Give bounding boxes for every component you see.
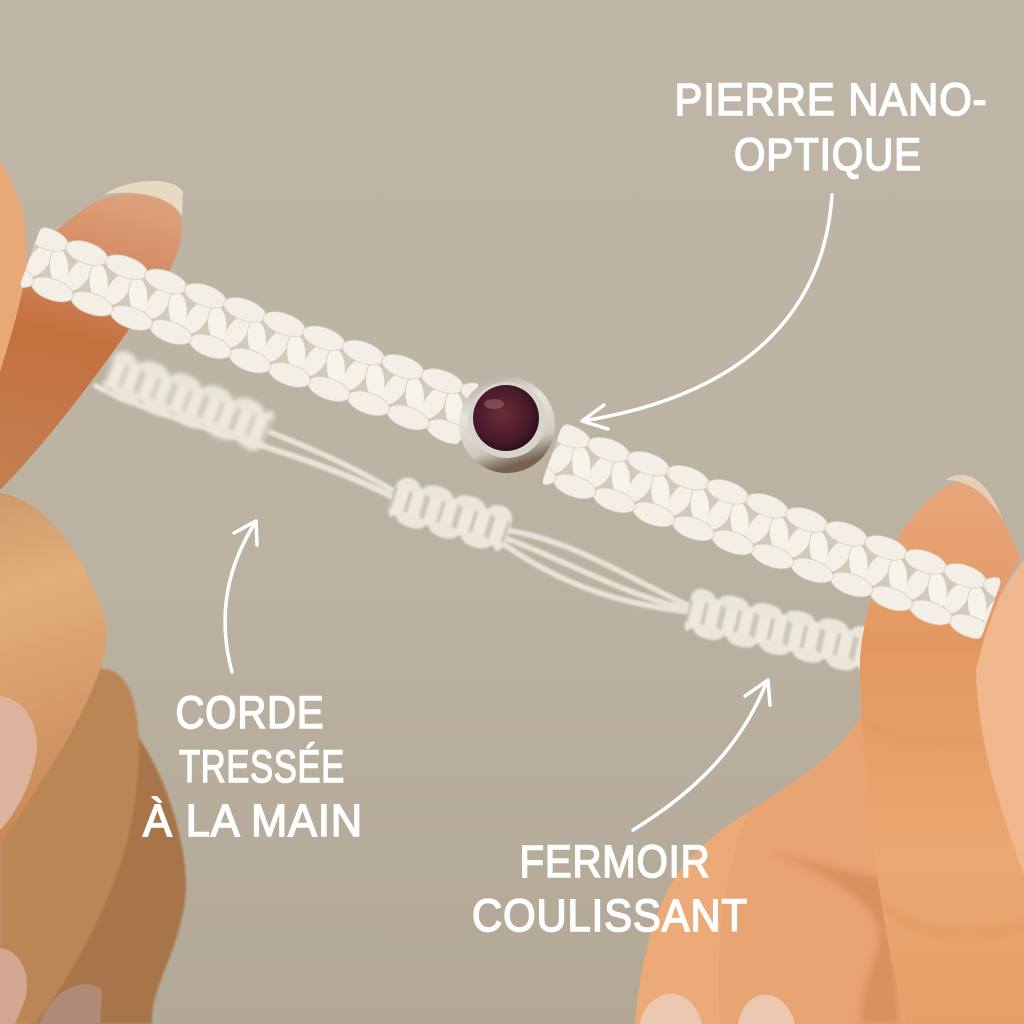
right hand — [635, 475, 1024, 1024]
main finger crease — [862, 720, 1024, 935]
right nail — [945, 475, 1003, 520]
left hand — [0, 162, 186, 1024]
label: corde tressée: TRESSÉE — [179, 741, 345, 792]
thumb — [0, 493, 107, 843]
label: pierre nano-optique: OPTIQUE — [734, 129, 922, 180]
left finger at edge — [0, 162, 27, 372]
lower band left — [99, 348, 277, 454]
lower band middle knot — [385, 474, 516, 556]
upper band left — [18, 225, 481, 447]
index nail — [105, 181, 183, 216]
arrow: to cord — [225, 521, 257, 672]
lower cords — [96, 386, 690, 612]
label: pierre nano-optique — [674, 74, 988, 180]
thumb nail — [0, 696, 37, 830]
arrow: to stone — [582, 195, 832, 429]
label: fermoir coulissant — [472, 836, 748, 941]
pendant stone — [459, 377, 555, 473]
arrow: to clasp — [633, 680, 770, 830]
label: corde tressée: À LA MAIN — [143, 795, 363, 846]
lower band sliding clasp — [683, 587, 880, 677]
lower right nails — [640, 994, 702, 1024]
label: pierre nano-optique: PIERRE NANO- — [674, 74, 988, 125]
third finger — [635, 812, 800, 1024]
middle finger nail — [0, 948, 27, 1024]
label: fermoir coulissant: FERMOIR — [520, 836, 710, 887]
upper band right — [541, 422, 1003, 642]
main finger — [860, 481, 1024, 1024]
back finger — [30, 720, 186, 1024]
label: corde tressée: CORDE — [176, 687, 324, 738]
finger gap shadow — [765, 850, 900, 1024]
middle finger — [0, 669, 139, 1024]
neighbour finger — [976, 560, 1024, 875]
back finger nail — [40, 984, 102, 1024]
label: fermoir coulissant: COULISSANT — [472, 890, 748, 941]
second finger — [718, 713, 907, 1024]
label: corde tressée — [143, 687, 363, 846]
index finger — [0, 194, 182, 490]
